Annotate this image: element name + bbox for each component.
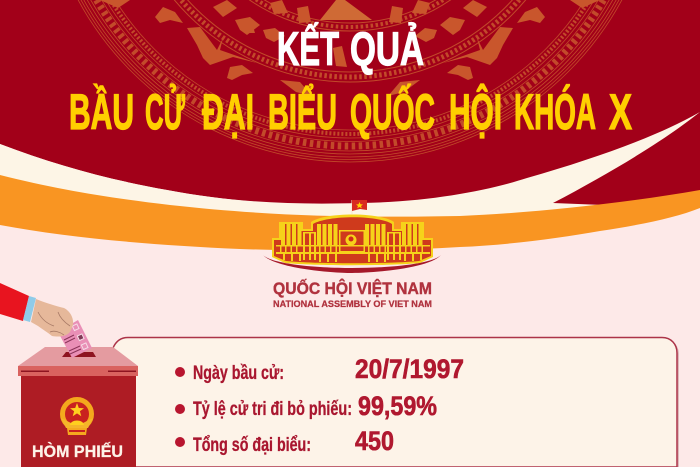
panel: election facts (113, 338, 679, 467)
icon: hand casting ballot (0, 283, 92, 358)
title (277, 22, 424, 75)
cream swoosh (0, 112, 700, 220)
fact: election date: 20/7/1997 (355, 354, 464, 384)
drum pattern (41, 0, 659, 162)
fact: election date (175, 354, 464, 384)
text: Quốc hội Việt Nam: QUỐC HỘI VIỆT NAM (273, 278, 432, 298)
subtitle (69, 83, 632, 140)
title: KẾT (277, 22, 339, 75)
subtitle: CỬ (145, 83, 185, 140)
sleeve (0, 283, 29, 321)
drum: birds and figures, left half (100, 0, 347, 96)
cuff (23, 296, 36, 322)
fact: total delegates: Tổng số đại biểu: (193, 435, 311, 456)
subtitle: X (609, 84, 632, 140)
orange band (0, 175, 700, 251)
subtitle: BIỂU (268, 84, 337, 140)
header: red background (0, 0, 700, 206)
subtitle: QUỐC (350, 83, 435, 140)
fact: total delegates (175, 426, 394, 456)
ballot paper (58, 320, 92, 358)
fact: total delegates: 450 (355, 426, 394, 456)
icon: ballot box (18, 347, 138, 467)
icon: national emblem (61, 400, 93, 435)
title: QUẢ (350, 22, 424, 75)
icon: assembly building (263, 214, 441, 273)
icon: flag (352, 200, 367, 214)
subtitle: ĐẠI (202, 84, 254, 140)
subtitle: BẦU (69, 84, 134, 140)
subtitle: KHÓA (514, 84, 596, 140)
fact: election date: Ngày bầu cử: (193, 363, 284, 384)
text: National Assembly of Viet Nam: NATIONAL ASSEMBLY OF VIET NAM (273, 299, 432, 310)
hand (31, 299, 73, 337)
logo: National Assembly of Viet Nam (263, 200, 441, 310)
subtitle: HỘI (449, 83, 502, 140)
fact: voter turnout (175, 391, 437, 421)
fact: voter turnout: 99,59% (358, 391, 437, 421)
drum: birds and figures, right half (388, 0, 600, 96)
text: ballot box label: HÒM PHIẾU (32, 442, 123, 461)
fact: voter turnout: Tỷ lệ cử tri đi bỏ phiếu: (193, 399, 352, 420)
drum: central tent (320, 0, 372, 20)
